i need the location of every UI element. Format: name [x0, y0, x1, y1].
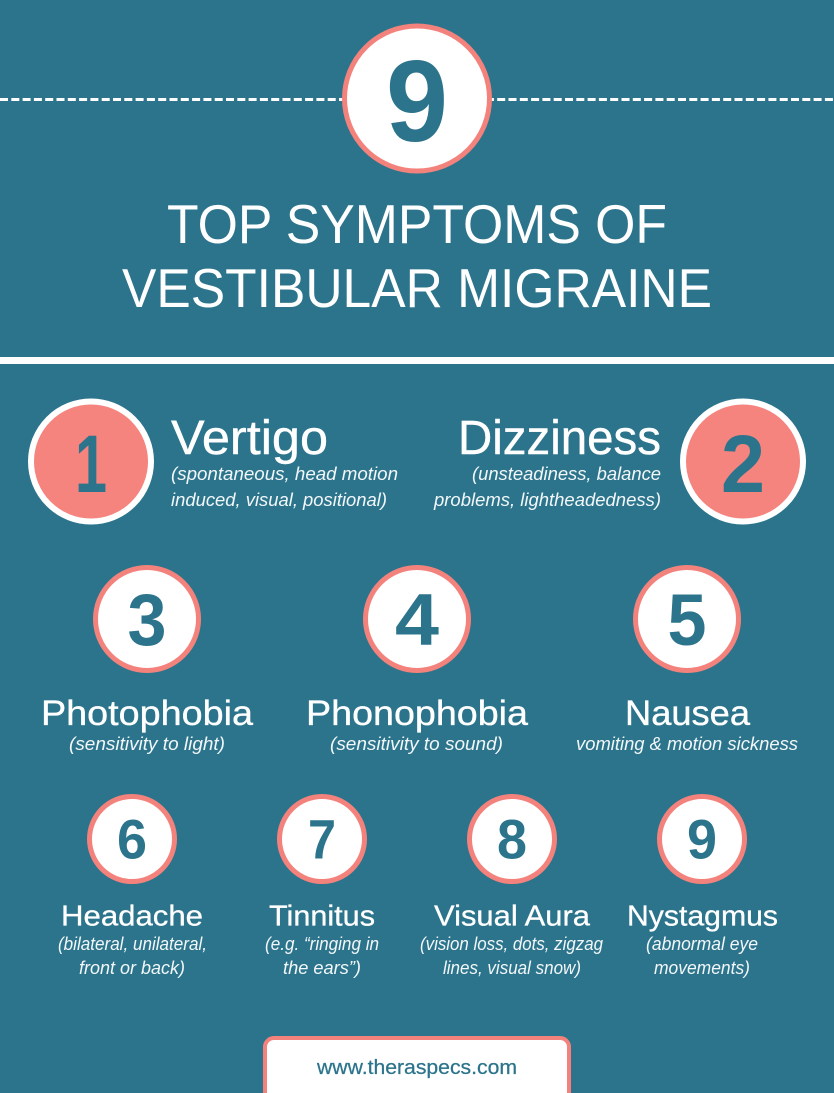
- symptom 3: photophobia: [41, 568, 254, 754]
- symptom 5: nausea: [576, 568, 798, 754]
- symptom 6: headache: [58, 796, 207, 978]
- symptom 5: nausea: vomiting & motion sickness: [576, 734, 798, 754]
- symptom 2: dizziness: Dizziness: [458, 412, 661, 465]
- symptom 7: tinnitus: [265, 796, 379, 978]
- symptom 4: phonophobia: [306, 568, 529, 754]
- symptom 5: nausea: 5: [668, 580, 706, 661]
- symptom 2: dizziness: problems, lightheadedness): [433, 490, 661, 510]
- symptom 9: nystagmus: movements): [654, 958, 750, 978]
- symptom 8: visual aura: lines, visual snow): [443, 958, 581, 978]
- symptom 1: vertigo: [31, 402, 398, 522]
- symptom 1: vertigo: induced, visual, positional): [171, 490, 387, 510]
- symptom 5: nausea: Nausea: [625, 694, 751, 733]
- badge: large number 9: 9: [386, 36, 448, 166]
- symptom 7: tinnitus: the ears”): [283, 958, 361, 978]
- divider: [0, 357, 834, 364]
- title: [122, 193, 712, 319]
- symptom 1: vertigo: (spontaneous, head motion: [171, 464, 398, 484]
- symptom 8: visual aura: [420, 796, 603, 978]
- symptom 4: phonophobia: 4: [395, 580, 439, 661]
- symptom 6: headache: (bilateral, unilateral,: [58, 934, 207, 954]
- badge: large number 9: [344, 26, 490, 171]
- symptom 9: nystagmus: 9: [687, 808, 717, 870]
- symptom 8: visual aura: (vision loss, dots, zigzag: [420, 934, 603, 954]
- symptom 4: phonophobia: (sensitivity to sound): [330, 734, 503, 754]
- symptom 6: headache: Headache: [61, 900, 203, 932]
- symptom 7: tinnitus: Tinnitus: [269, 900, 375, 932]
- symptom 1: vertigo: Vertigo: [171, 412, 328, 465]
- symptom 2: dizziness: [433, 402, 803, 522]
- symptom 3: photophobia: 3: [128, 580, 166, 661]
- symptom 9: nystagmus: [627, 796, 778, 978]
- title: TOP SYMPTOMS OF: [167, 193, 667, 255]
- symptom 8: visual aura: Visual Aura: [434, 900, 591, 932]
- symptom 9: nystagmus: Nystagmus: [627, 900, 778, 932]
- symptom 2: dizziness: (unsteadiness, balance: [472, 464, 661, 484]
- dashed line: [0, 98, 834, 101]
- symptom 6: headache: 6: [117, 808, 147, 870]
- footer website box: www.theraspecs.com: [316, 1057, 517, 1079]
- symptom 8: visual aura: 8: [497, 808, 527, 870]
- symptom 1: vertigo: 1: [75, 419, 107, 510]
- symptom 2: dizziness: 2: [721, 419, 765, 510]
- symptom 4: phonophobia: Phonophobia: [306, 694, 529, 733]
- footer website box: [265, 1038, 569, 1093]
- symptom 7: tinnitus: 7: [308, 808, 336, 870]
- symptom 7: tinnitus: (e.g. “ringing in: [265, 934, 379, 954]
- symptom 3: photophobia: (sensitivity to light): [69, 734, 225, 754]
- symptom 3: photophobia: Photophobia: [41, 694, 254, 733]
- symptom 9: nystagmus: (abnormal eye: [646, 934, 758, 954]
- title: VESTIBULAR MIGRAINE: [122, 257, 712, 319]
- symptom 6: headache: front or back): [79, 958, 185, 978]
